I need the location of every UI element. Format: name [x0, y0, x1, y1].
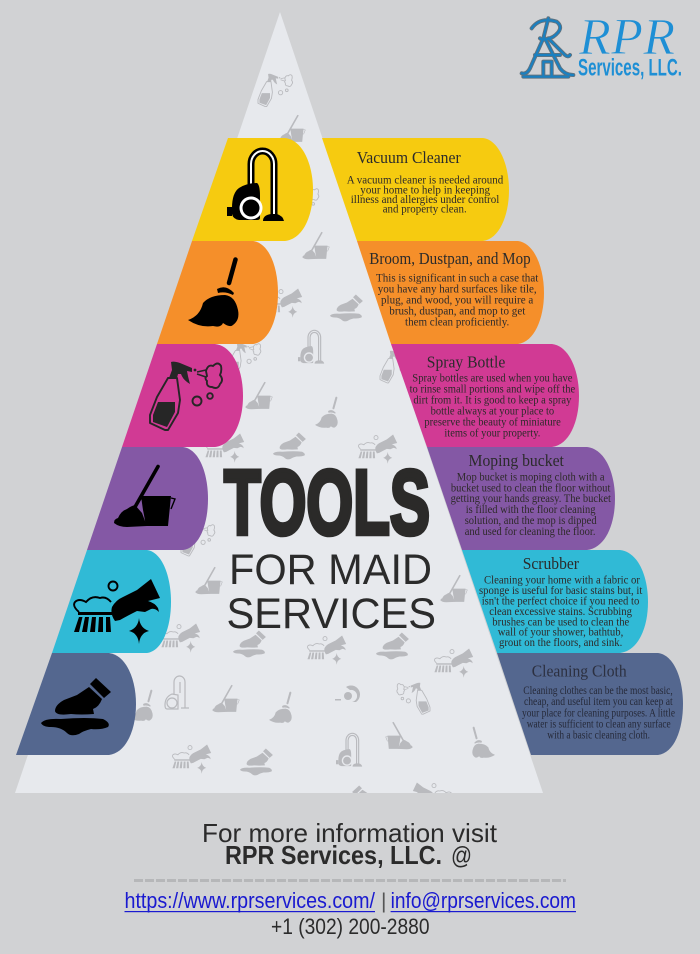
text block: phone number: +1 (302) 200-2880 — [271, 914, 430, 939]
text block: broom dustpan mop: This is significant in such a case that — [376, 271, 539, 285]
logo: RPR Services, LLC. — [522, 9, 682, 82]
text block: vacuum cleaner: your home to help in keeping — [360, 182, 490, 196]
panel: scrubber text — [462, 550, 648, 653]
logo: RPR Services, LLC.: RPR — [578, 9, 675, 66]
text block: broom dustpan mop: plug, and wood, you will require a — [381, 293, 534, 307]
icon: mop and bucket — [114, 466, 175, 527]
text block: moping bucket: bucket used to clean the floor without — [451, 480, 611, 494]
text block: for more information: For more information visit — [202, 818, 498, 848]
text block: moping bucket: getting your hands greasy. The bucket — [451, 491, 612, 505]
footer: contact information — [124, 818, 576, 939]
icon: scrubbing hand — [74, 579, 160, 644]
panel: vacuum cleaner text — [322, 138, 509, 241]
text block: spray bottle: dirt from it. It is good to keep a spray — [413, 392, 571, 406]
text block: moping bucket: and used for cleaning the floor. — [465, 524, 596, 538]
icon: broom — [188, 260, 238, 327]
text block: scrubber: Cleaning your home with a fabric or — [484, 573, 640, 587]
text block: spray bottle: bottle always at your place to — [431, 404, 554, 418]
pyramid background with watermark icons — [15, 12, 543, 812]
text block: cleaning cloth: with a basic cleaning cloth. — [547, 728, 650, 742]
panel: cloth icon tab — [16, 653, 136, 755]
panel: broom dustpan mop text — [357, 241, 544, 344]
heading: broom dustpan and mop: Broom, Dustpan, and Mop — [369, 249, 531, 268]
text block: moping bucket: is filled with the floor cleaning — [466, 502, 596, 516]
text block: scrubber: brushes can be used to clean the — [492, 614, 629, 628]
text block: cleaning cloth — [522, 683, 675, 742]
text block: vacuum cleaner — [347, 173, 503, 216]
panel: broom icon tab — [157, 241, 278, 344]
icon: house with letter R — [522, 18, 573, 77]
panel: mop bucket icon tab — [87, 447, 208, 550]
text block: spray bottle — [410, 371, 575, 440]
text block: moping bucket: solution, and the mop is dipped — [465, 513, 597, 527]
heading: scrubber: Scrubber — [523, 554, 579, 573]
text block: scrubber — [479, 573, 643, 649]
text block: vacuum cleaner: A vacuum cleaner is needed around — [347, 173, 503, 187]
text block: scrubber: grout on the floors, and sink. — [499, 635, 622, 649]
text block: company name: RPR Services, LLC. — [225, 840, 442, 870]
text block: vacuum cleaner: illness and allergies under control — [351, 192, 500, 206]
text block: spray bottle: to rinse small portions and wipe off the — [410, 382, 575, 396]
text block: spray bottle: preserve the beauty of miniature — [424, 414, 561, 428]
text block: broom dustpan mop — [376, 271, 539, 329]
panel: vacuum cleaner icon tab — [192, 138, 313, 241]
text block: scrubber: clean excessive stains. Scrubbing — [489, 604, 632, 618]
panel: spray bottle text — [391, 344, 579, 447]
text block: website and email links: info@rprservices.com — [391, 888, 576, 913]
text block: moping bucket: Mop bucket is moping cloth with a — [457, 469, 605, 483]
text block: broom dustpan mop: you have any hard surfaces like tile, — [378, 282, 537, 296]
panel: spray bottle icon tab — [122, 344, 243, 447]
title: FOR MAID — [229, 546, 432, 594]
title: TOOLS — [224, 452, 430, 554]
heading: cleaning cloth: Cleaning Cloth — [532, 662, 627, 681]
text block: website and email links — [124, 888, 576, 913]
text block: website and email links: https://www.rprservices.com/ — [124, 888, 376, 913]
text block: spray bottle: Spray bottles are used when you have — [412, 371, 572, 385]
text block: broom dustpan mop: them clean proficiently. — [405, 315, 509, 329]
text block: scrubber: sponge is useful for basic stains but, it — [479, 583, 643, 597]
text block: scrubber: isn't the perfect choice if you need to — [482, 594, 639, 608]
icon: hand wiping with cloth — [41, 678, 111, 735]
icon: spray bottle — [150, 362, 222, 430]
panel: moping bucket text — [427, 447, 615, 550]
text block: spray bottle: items of your property. — [444, 426, 540, 440]
title: SERVICES — [226, 590, 436, 638]
title — [224, 452, 436, 638]
text block: broom dustpan mop: brush, dustpan, and mop to get — [389, 304, 526, 318]
panel: scrubber icon tab — [52, 550, 171, 653]
text block: scrubber: wall of your shower, bathtub, — [498, 624, 623, 638]
heading: spray bottle: Spray Bottle — [427, 352, 505, 371]
heading: moping bucket: Moping bucket — [468, 451, 564, 470]
panel: cleaning cloth text — [497, 653, 683, 755]
text block: moping bucket — [451, 469, 612, 538]
text block: company name: @ — [451, 842, 472, 870]
text block: website and email links: | — [381, 890, 386, 913]
heading: vacuum cleaner: Vacuum Cleaner — [357, 148, 461, 167]
text block: vacuum cleaner: and property clean. — [383, 202, 467, 216]
icon: vacuum cleaner — [227, 151, 284, 221]
